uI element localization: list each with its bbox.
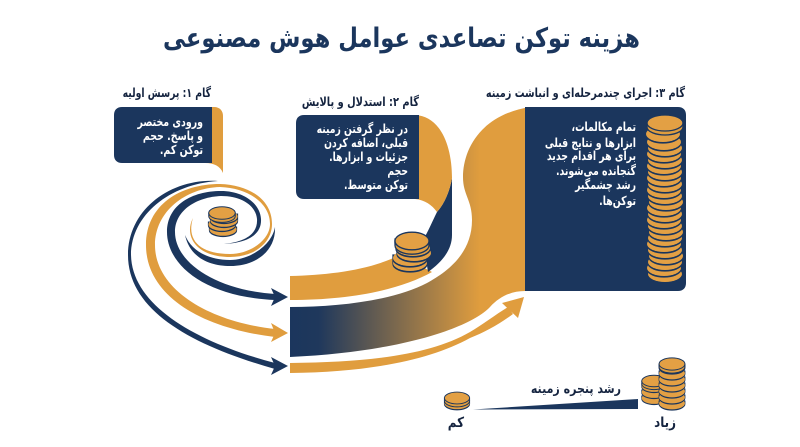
- box: navy: [114, 107, 212, 163]
- text: step 2: توکن متوسط.: [344, 178, 408, 192]
- box: navy: [296, 115, 419, 199]
- label: low: کم: [448, 415, 464, 431]
- title: هزینه توکن تصاعدی عوامل هوش مصنوعی: [163, 22, 640, 55]
- arrow: inner navy: [167, 191, 288, 306]
- text: step 2: جزئیات و ابزارها.: [329, 150, 408, 164]
- coin stack: step 1: [208, 207, 238, 237]
- band: lower orange: [290, 255, 432, 300]
- text: step 1: ورودی مختصر: [137, 115, 203, 129]
- text: step 3: [545, 120, 636, 208]
- text: step 1: توکن کم.: [160, 143, 203, 157]
- band: navy twist: [423, 178, 452, 272]
- coin stack: step 3: [646, 115, 683, 283]
- ribbon: step 2 band: [290, 115, 452, 300]
- panel: step 3: [525, 107, 686, 291]
- tail: orange: [205, 107, 223, 173]
- band: upper orange: [415, 115, 452, 212]
- label: high: زیاد: [654, 415, 676, 431]
- heading: step 1: گام ۱: پرسش اولیه: [123, 85, 211, 100]
- spiral of arrows: [128, 181, 288, 375]
- text: step 2: [317, 122, 408, 192]
- legend: context window growth: [444, 358, 685, 431]
- text: step 2: در نظر گرفتن زمینه: [317, 122, 408, 136]
- panel: step 2: [296, 115, 419, 199]
- spiral: navy crescent: [185, 227, 275, 266]
- text: step 1: و پاسخ. حجم: [143, 129, 203, 143]
- text: step 3: ابزارها و نتایج قبلی: [545, 136, 636, 150]
- ribbon: step 3 growing band: [290, 107, 530, 357]
- text: step 3: رشد چشمگیر: [574, 177, 636, 192]
- heading: step 2: گام ۲: استدلال و پالایش: [302, 94, 419, 109]
- ribbon: thin arrow to step 3: [290, 297, 524, 373]
- arrow: outer navy: [128, 181, 288, 375]
- icon: large coin stacks: [642, 358, 685, 410]
- arrow: orange: [146, 184, 288, 342]
- wedge: growth: [473, 399, 638, 410]
- box: navy: [525, 107, 686, 291]
- heading: step 3: گام ۳: اجرای چندمرحله‌ای و انباشت زمینه: [486, 85, 685, 100]
- icon: small coin stack: [444, 392, 470, 410]
- text: step 3: تمام مکالمات،: [572, 120, 636, 134]
- text: step 2: قبلی، اضافه کردن: [324, 136, 408, 150]
- text: step 1: [137, 115, 203, 157]
- text: step 3: توکن‌ها.: [599, 194, 636, 208]
- coin stack: step 2: [393, 232, 431, 272]
- text: step 3: برای هر اقدام جدید: [547, 149, 636, 163]
- text: step 2: حجم: [387, 164, 408, 178]
- label: growth: رشد پنجره زمینه: [531, 381, 621, 396]
- panel: step 1: [114, 107, 223, 173]
- text: step 3: گنجانده می‌شوند.: [556, 163, 636, 178]
